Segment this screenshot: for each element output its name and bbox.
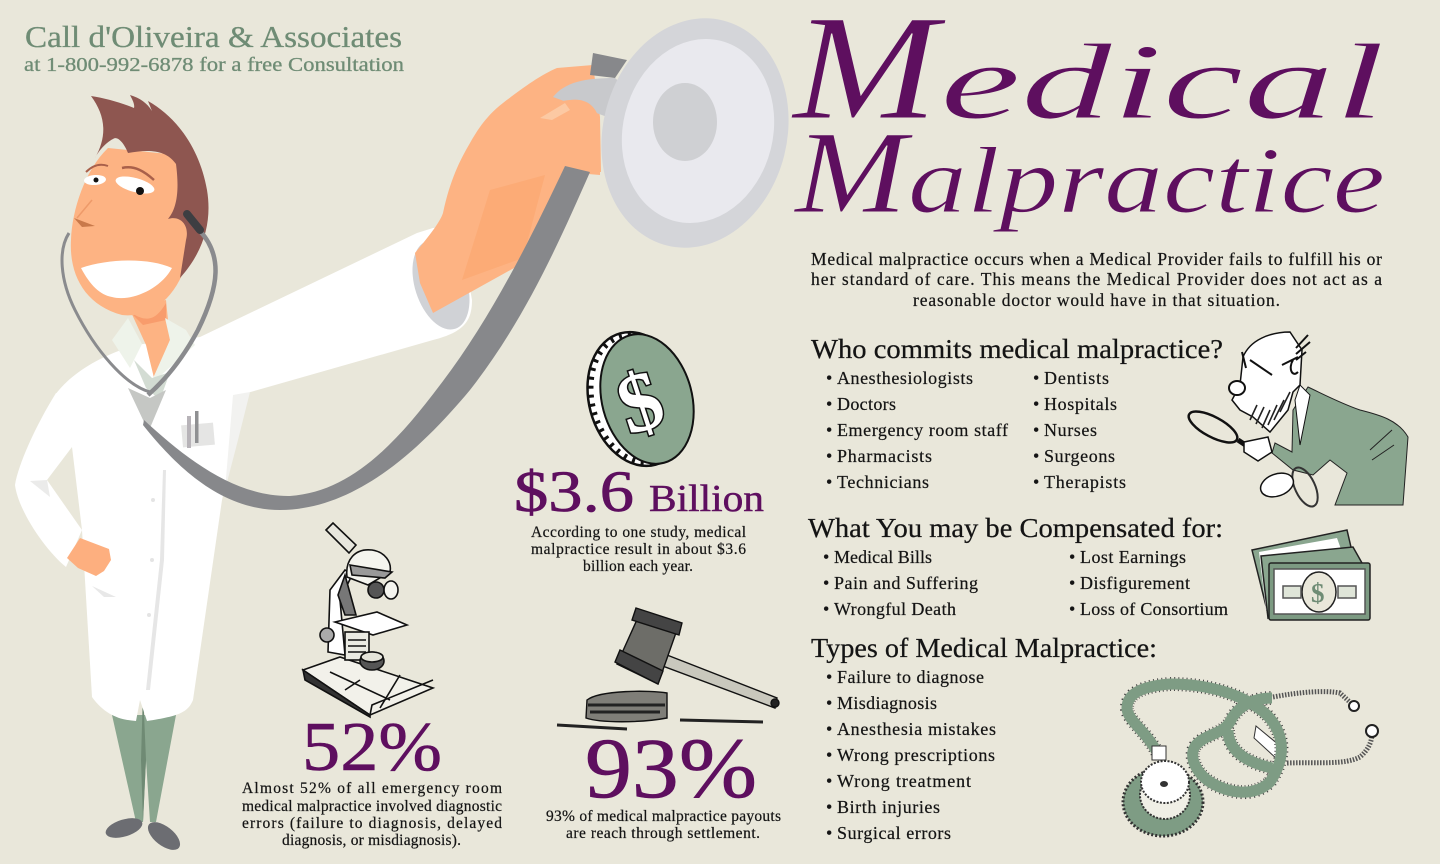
doctor legs xyxy=(103,690,185,855)
list: providers: Pharmacists xyxy=(837,446,932,466)
list: providers: Surgeons xyxy=(1044,446,1115,466)
list: types: Birth injuries xyxy=(837,797,940,817)
icon: sketched stethoscope xyxy=(1123,684,1378,836)
title: Medical Malpractice: edical xyxy=(940,23,1385,142)
icon: gavel xyxy=(557,608,779,729)
list: compensation items: Disfigurement xyxy=(1080,573,1190,593)
list: compensation items: Loss of Consortium xyxy=(1080,599,1228,619)
stethoscope chest piece xyxy=(578,0,812,268)
stat: 52 percent xyxy=(242,709,502,849)
heading: compensation: What You may be Compensated for: xyxy=(808,513,1223,543)
stat: 52 percent: 52% xyxy=(302,709,442,786)
panel: types xyxy=(811,633,1157,843)
list: providers: Dentists xyxy=(1044,368,1109,388)
list: providers: Anesthesiologists xyxy=(837,368,973,388)
icon: coin with dollar sign xyxy=(573,321,708,477)
list: compensation items: Pain and Suffering xyxy=(834,573,978,593)
list: providers: • xyxy=(1033,446,1039,466)
stat: 3.6 billion xyxy=(514,459,764,575)
list: providers: Nurses xyxy=(1044,420,1097,440)
caption: 52 percent: medical malpractice involved diagnostic xyxy=(242,798,502,815)
list: providers: • xyxy=(1033,394,1039,414)
doctor coat xyxy=(15,228,472,721)
title: Medical Malpractice: alpractice xyxy=(908,129,1385,233)
caption: 93 percent: are reach through settlement. xyxy=(566,825,760,842)
list: types xyxy=(826,667,996,843)
heading: who commits: Who commits medical malpractice? xyxy=(811,334,1223,364)
list: compensation items: Lost Earnings xyxy=(1080,547,1186,567)
list: providers: • xyxy=(1033,472,1039,492)
list: providers: Doctors xyxy=(837,394,896,414)
list: types: Wrong treatment xyxy=(837,771,971,791)
stethoscope ear tubes xyxy=(62,214,216,428)
list: types: • xyxy=(826,719,832,739)
coat pocket with pens xyxy=(181,411,215,448)
title: Medical Malpractice xyxy=(791,0,1385,238)
stat: 3.6 billion: Billion xyxy=(649,478,764,520)
list: compensation items: • xyxy=(1069,547,1075,567)
list: types: • xyxy=(826,823,832,843)
raised arm and hand xyxy=(402,53,640,337)
list: types: • xyxy=(826,745,832,765)
list: compensation items: • xyxy=(1069,573,1075,593)
list: types: Wrong prescriptions xyxy=(837,745,995,765)
caption: 3.6 billion xyxy=(531,524,746,575)
caption: 52 percent: diagnosis, or misdiagnosis). xyxy=(282,832,461,849)
caption: 3.6 billion: According to one study, medical xyxy=(531,524,746,541)
list: providers: Emergency room staff xyxy=(837,420,1008,440)
list: types: • xyxy=(826,667,832,687)
panel: who commits xyxy=(811,334,1223,492)
caption: 3.6 billion: malpractice result in about $3.6 xyxy=(531,541,746,558)
stat: 3.6 billion: $3.6 xyxy=(514,459,634,524)
neck and collar xyxy=(112,300,195,400)
head xyxy=(71,95,209,315)
list: providers: Therapists xyxy=(1044,472,1126,492)
list: compensation items xyxy=(823,547,1228,619)
call to action heading: at 1-800-992-6878 for a free Consultation xyxy=(24,54,404,76)
list: compensation items: • xyxy=(1069,599,1075,619)
list: providers: Technicians xyxy=(837,472,929,492)
icon: coin with dollar sign: $ xyxy=(606,352,675,453)
caption: 93 percent xyxy=(546,808,781,842)
list: types: • xyxy=(826,693,832,713)
intro paragraph xyxy=(811,249,1382,310)
stethoscope tube xyxy=(143,166,590,510)
list: providers: • xyxy=(826,394,832,414)
list: providers: • xyxy=(1033,420,1039,440)
list: types: Surgical errors xyxy=(837,823,951,843)
list: types: Failure to diagnose xyxy=(837,667,984,687)
list: providers xyxy=(826,368,1126,492)
list: providers: • xyxy=(826,420,832,440)
caption: 52 percent: errors (failure to diagnosis, delayed xyxy=(242,815,502,832)
left hand on hip xyxy=(67,538,111,576)
list: compensation items: Medical Bills xyxy=(834,547,932,567)
icon: microscope xyxy=(303,523,433,717)
stat: 93 percent xyxy=(546,720,781,842)
caption: 52 percent: Almost 52% of all emergency room xyxy=(242,780,502,797)
icon: doctor with magnifying glass xyxy=(1184,332,1408,510)
intro paragraph: Medical malpractice occurs when a Medical Provider fails to fulfill his or xyxy=(811,249,1382,269)
panel: compensation xyxy=(808,513,1228,619)
list: providers: Hospitals xyxy=(1044,394,1117,414)
list: types: Anesthesia mistakes xyxy=(837,719,996,739)
caption: 3.6 billion: billion each year. xyxy=(583,558,693,575)
caption: 52 percent xyxy=(242,780,502,849)
list: providers: • xyxy=(1033,368,1039,388)
intro paragraph: her standard of care. This means the Medical Provider does not act as a xyxy=(811,269,1382,289)
icon: stack of money xyxy=(1252,530,1370,620)
call to action heading xyxy=(24,19,404,76)
title: Medical Malpractice: M xyxy=(793,107,913,238)
illustration: doctor with stethoscope xyxy=(15,0,812,855)
intro paragraph: reasonable doctor would have in that situation. xyxy=(913,290,1280,310)
list: compensation items: • xyxy=(823,573,829,593)
list: compensation items: • xyxy=(823,599,829,619)
stat: 93 percent: 93% xyxy=(585,720,757,816)
list: providers: • xyxy=(826,446,832,466)
call to action heading: Call d'Oliveira & Associates xyxy=(25,19,402,54)
list: providers: • xyxy=(826,368,832,388)
list: compensation items: • xyxy=(823,547,829,567)
heading: types: Types of Medical Malpractice: xyxy=(811,633,1157,663)
icon: stack of money: $ xyxy=(1311,578,1324,608)
list: types: • xyxy=(826,797,832,817)
caption: 93 percent: 93% of medical malpractice payouts xyxy=(546,808,781,825)
list: providers: • xyxy=(826,472,832,492)
list: types: Misdiagnosis xyxy=(837,693,937,713)
list: types: • xyxy=(826,771,832,791)
list: compensation items: Wrongful Death xyxy=(834,599,956,619)
